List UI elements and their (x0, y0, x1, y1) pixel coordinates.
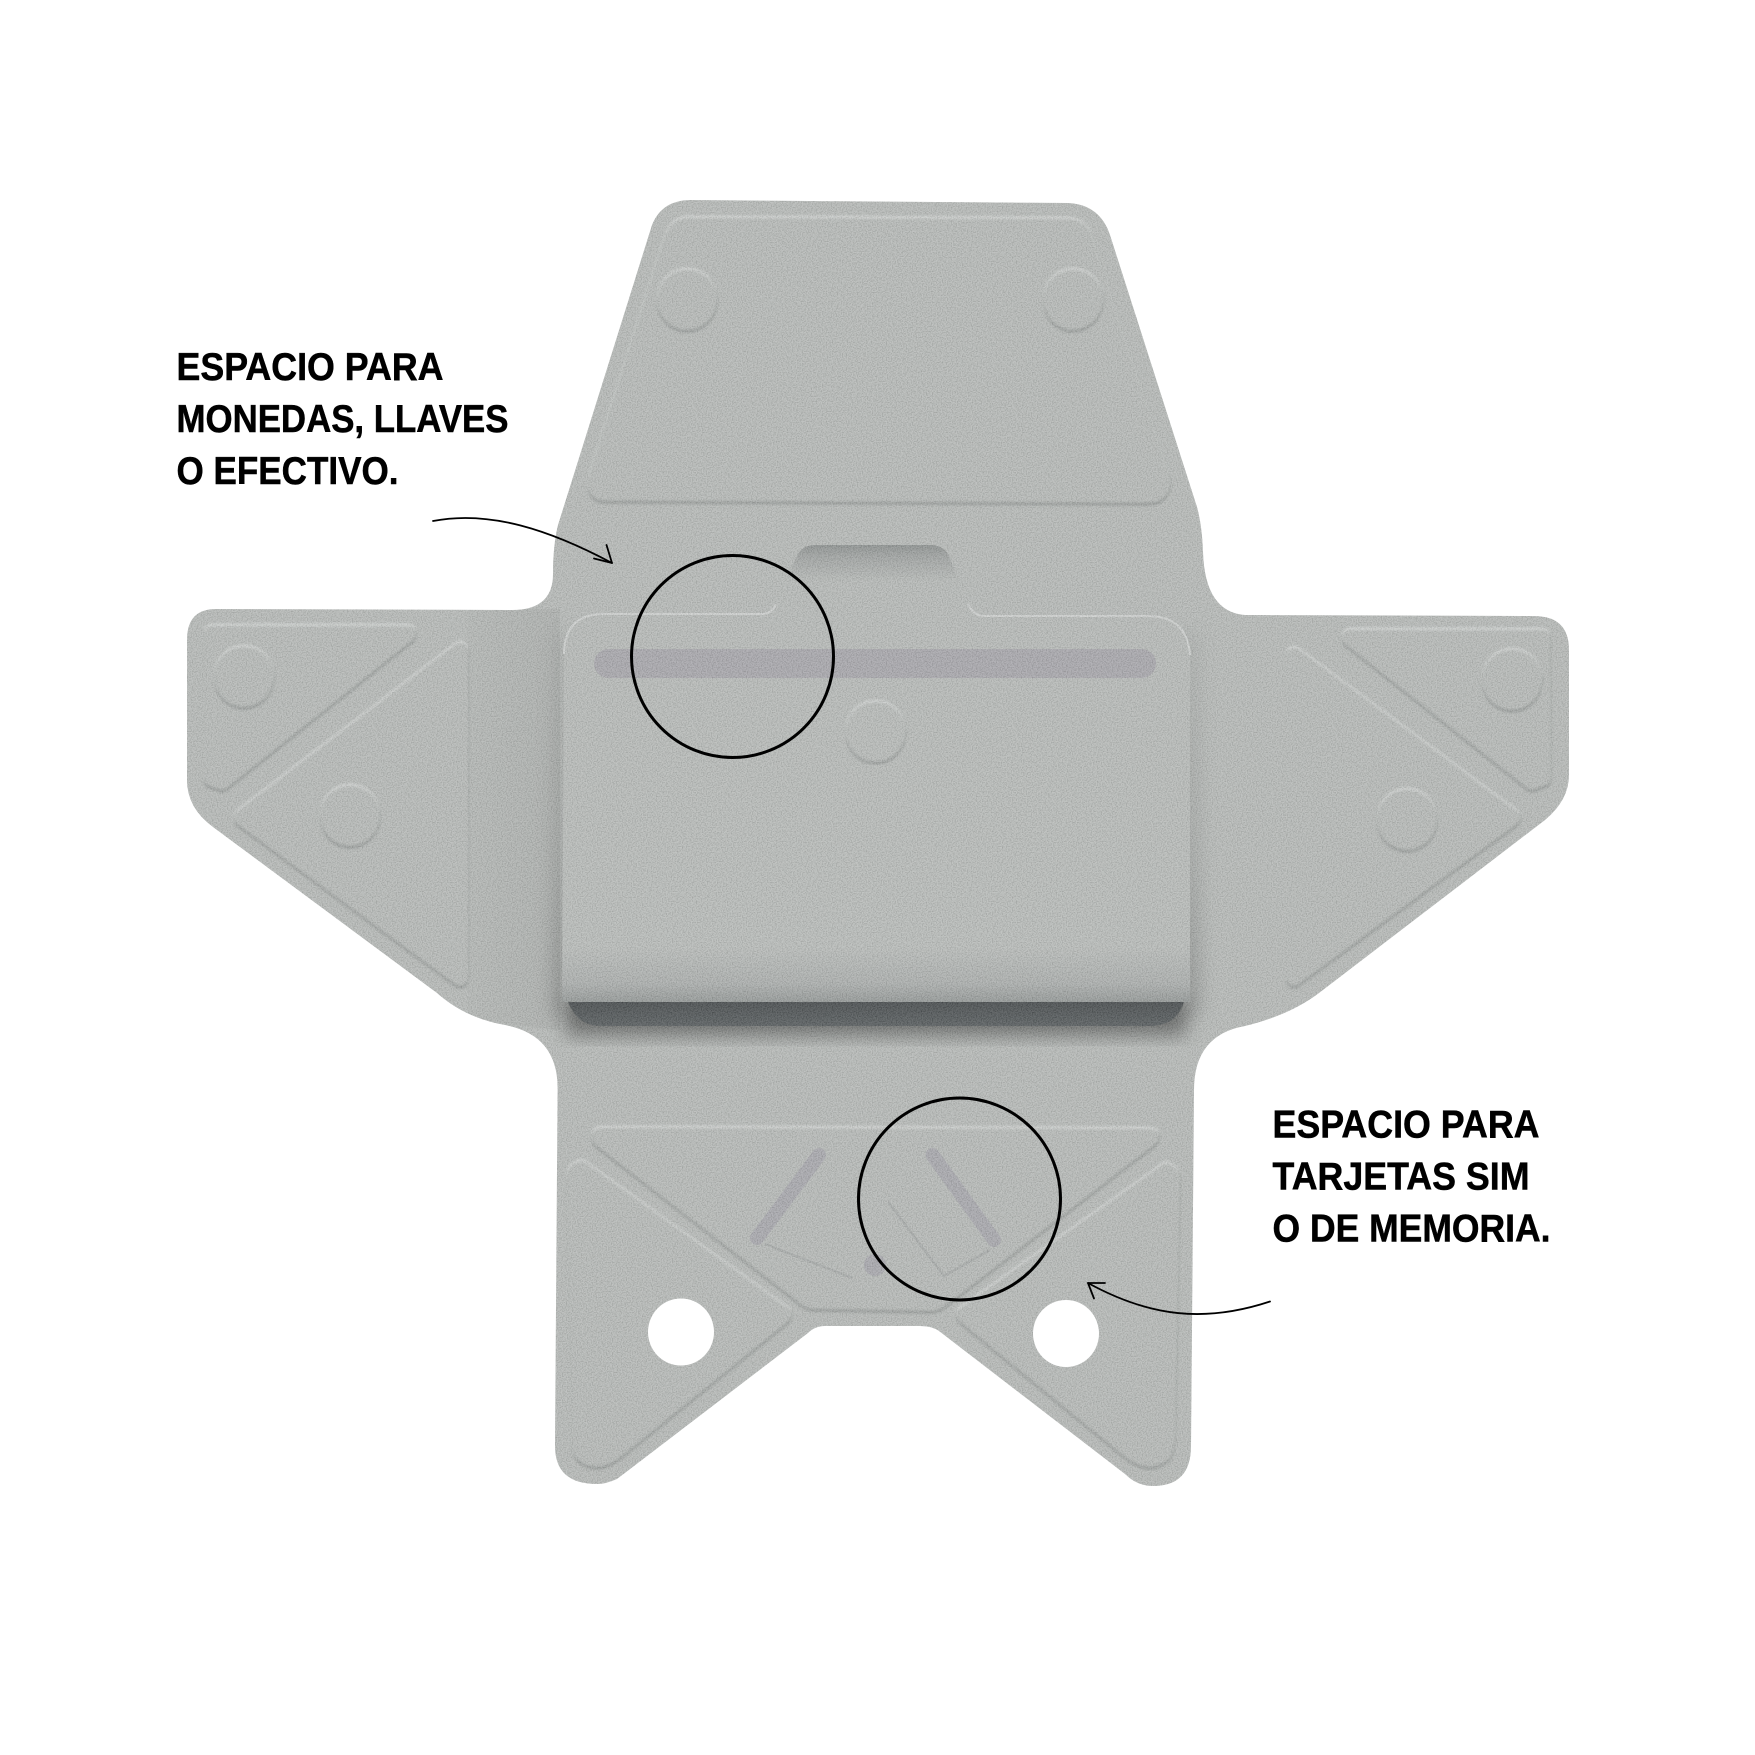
callout line 2: TARJETAS SIM (1272, 1156, 1530, 1198)
callout: coins and keys (176, 346, 508, 493)
left arm lower triangle (242, 651, 460, 978)
mounting holes (648, 1298, 1099, 1367)
pocket rivet (846, 702, 906, 762)
rivet right arm lower (1377, 790, 1437, 850)
arrow: to coin space (433, 518, 612, 563)
SIM card slots (757, 1155, 994, 1278)
faint SIM tray outlines (765, 1202, 990, 1278)
rivet left arm upper (214, 647, 274, 707)
callout line 1: ESPACIO PARA (1272, 1104, 1540, 1146)
arrow: to SIM space (1088, 1283, 1270, 1314)
callout line 3: O DE MEMORIA. (1272, 1208, 1550, 1250)
lower central triangle panel (591, 1128, 1159, 1311)
infographic canvas (178, 200, 1569, 1486)
right arm upper triangle (1350, 638, 1543, 782)
rivet top right (1043, 270, 1103, 330)
left diagonal slot (757, 1155, 819, 1238)
central pocket with tab (562, 545, 1190, 1002)
rivet left arm lower (320, 786, 380, 846)
small centre dot (864, 1254, 886, 1276)
callout line 3: O EFECTIVO. (176, 450, 398, 493)
flap rivets (214, 270, 1542, 850)
right hole (1033, 1300, 1099, 1367)
left arm upper triangle (211, 634, 408, 782)
callout line 1: ESPACIO PARA (176, 346, 444, 389)
surface grain (180, 195, 1575, 1490)
left hole (648, 1298, 714, 1366)
dark gap under pocket (568, 1002, 1184, 1026)
lower left triangle panel (566, 1161, 792, 1467)
highlight circle: coin space (632, 556, 834, 758)
right diagonal slot (932, 1155, 994, 1240)
highlight circle: SIM space (858, 1098, 1060, 1300)
callout: SIM and memory cards (1272, 1104, 1550, 1250)
top flap raised panel (588, 218, 1170, 503)
lower right triangle panel (956, 1163, 1180, 1467)
horizontal slot (594, 649, 1156, 678)
embossed panels on the flaps (211, 218, 1543, 1467)
wallet body silhouette (187, 200, 1569, 1486)
rivet top left (657, 270, 717, 330)
pocket shape (562, 545, 1190, 1002)
right arm lower triangle (1294, 656, 1512, 978)
rivet right arm upper (1482, 650, 1542, 710)
pocket top highlight (564, 604, 1190, 655)
device: folded grey wallet (180, 195, 1575, 1490)
callout line 2: MONEDAS, LLAVES (176, 398, 508, 441)
fold shading around the central pocket (468, 609, 1200, 1036)
